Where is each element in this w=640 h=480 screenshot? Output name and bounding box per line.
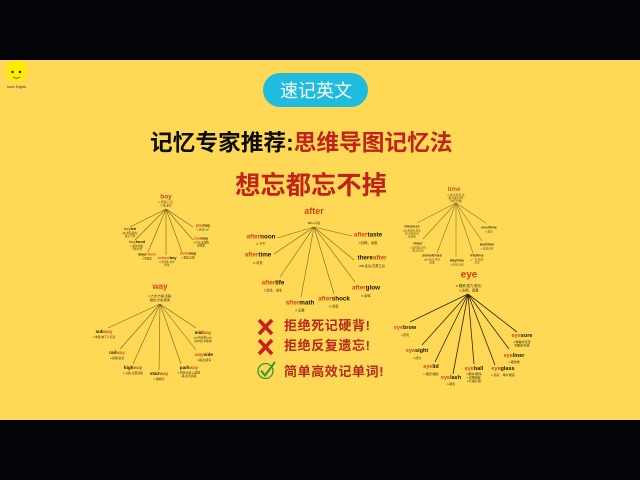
mind map: time: bedtime [480, 242, 494, 246]
mind map: way: way [151, 282, 168, 291]
mind map: boy: cowboy [194, 236, 209, 240]
mind map: eye: n.镜片、单片眼镜 [491, 372, 515, 377]
mind map: way: n.地铁;地下人行道 [93, 335, 116, 339]
mind map: boy: schoolboy [157, 256, 177, 260]
mind map: eye: eyebrow [394, 325, 417, 331]
mind map: time: n.时间;时刻;次 [447, 193, 465, 197]
mind map: way: n.路边;路旁 [197, 358, 211, 362]
mind map: after: thereafter [357, 254, 387, 261]
mind map: boy: boy [160, 194, 172, 200]
mind map: boy: boyfriend [138, 252, 156, 256]
item 3 text: 简单高效记单词! [284, 364, 384, 379]
mind map: time: adv.有时;不时 [424, 258, 440, 262]
mind map: eye: v.注视、观看 [459, 288, 479, 292]
mind map: eye: v.盯着打量 [467, 378, 481, 383]
mind map: after: n.余震 [329, 304, 339, 308]
mind map: way [93, 282, 213, 381]
mind map: eye: n.视力 [413, 355, 421, 360]
mind map: way: n.林荫大道;公园道 [178, 370, 201, 374]
mind map: way: parkway [180, 365, 199, 370]
mind map: time: adj.永恒的;永久 [403, 228, 421, 232]
mind map: eye [394, 270, 532, 386]
mind map: way: midway [195, 330, 212, 335]
mind map: after: afternoon [246, 233, 276, 240]
mind map: time: overtime [481, 226, 497, 230]
mind map: boy: 孩子气的 [125, 234, 136, 238]
mind map: way: 路,风景道路 [182, 374, 197, 378]
mind map: time: time [448, 186, 461, 193]
mind map: after: after [304, 206, 324, 216]
mind map: time: daytime [450, 258, 464, 262]
mind map: time: n.一生;终身; [470, 258, 484, 262]
item 2 text: 拒绝反复遗忘! [284, 338, 371, 353]
mind map: time: timeless [404, 224, 420, 228]
mind map: eye: n.眼线膏 [508, 359, 520, 364]
mind map: time: n.定时器;计时 [410, 246, 426, 250]
mind map: after: n.将来 [253, 260, 263, 265]
logo: smiley with caption: Learn English [7, 85, 26, 89]
mind map: after: aftershock [318, 295, 350, 302]
mind map: after [245, 206, 387, 312]
mind map: time: n.就寝时间 [481, 246, 494, 250]
mind map: way: n.方法;方面;道路; [148, 293, 172, 298]
mind map: time: timer [413, 242, 423, 246]
mind map: eye: n.眼球;眼珠; [466, 371, 482, 376]
title: 记忆专家推荐:思维导图记忆法 [150, 130, 452, 156]
mind map: eye: n.难看的东西; [513, 339, 531, 344]
icon: green check [258, 362, 275, 378]
mind map: time: 器;记时员 [412, 248, 424, 252]
mind map: after: n.余晖 [361, 293, 371, 298]
mind map: boy: n.花花公子 [197, 228, 210, 232]
mind map: boy: n.牛仔;美国西 [193, 240, 209, 244]
mind map: eye: v.仔细观察; [467, 374, 482, 380]
mind map: eye: eyeball [465, 366, 484, 372]
mind map: time: 数;时期;时代 [449, 196, 464, 200]
mind map: boy: playboy [196, 224, 211, 228]
mind map: boy: 男生 [164, 263, 170, 267]
mind map: time: 时机;倍数 [450, 199, 462, 203]
mind map: time: 影响的 [408, 234, 416, 238]
mind map: boy: newsboy [180, 252, 197, 256]
mind map: time: n.白天;日间 [450, 262, 464, 266]
mind map: way: railway [109, 350, 125, 355]
mind map: after: afterglow [352, 284, 380, 291]
mind map: time: lifetime [470, 254, 484, 258]
mind map: way: adj.中途的;adv. [194, 336, 213, 340]
mind map: way: highway [124, 365, 143, 370]
mind map: after: aftertaste [354, 231, 383, 238]
mind map: eye: eyesight [406, 348, 428, 354]
logo: smiley with caption [6, 60, 27, 89]
mind map: time: 的;不受时间 [405, 232, 419, 236]
mind map: after: n.下午 [256, 241, 266, 246]
mind map: boy: boyhood [129, 240, 146, 244]
mind map: way: n.铁路;轨道 [110, 356, 124, 360]
mind map: after: afterlife [262, 279, 285, 286]
badge: 速记英文 [263, 73, 368, 107]
mind map: boy: n.童年时期; [130, 244, 144, 248]
mind map: boy: 部牧童 [197, 244, 205, 248]
mind map: way: 在中途;半路地 [194, 339, 212, 343]
mind map: boy: n.男学生;中学 [159, 260, 175, 264]
mind map: eye: eye [461, 270, 478, 280]
mind map: after: aftertime [245, 251, 272, 258]
mind map: time: sometimes [422, 254, 442, 258]
mind map: eye: eyesore [512, 333, 532, 339]
mind map: eye: n.睫毛 [447, 381, 455, 386]
mind map: after: n.回味、余韵 [359, 240, 377, 245]
mind map: way: 路线;方向;距离 [150, 297, 170, 302]
mind map: eye: n.眉毛 [401, 332, 409, 337]
mind map: time: 间或 [429, 260, 435, 264]
checklist [258, 318, 384, 379]
mind map: eye: eyeliner [504, 353, 525, 359]
badge: 速记英文: 速记英文 [280, 81, 352, 101]
mind map: after: n.余生、来生 [264, 288, 283, 292]
item 1 text: 拒绝死记硬背! [284, 318, 371, 333]
mind map: time [403, 186, 497, 266]
mind map: eye: 刺眼的东西 [514, 342, 530, 348]
mind map: way: stairway [150, 371, 169, 376]
mind map: after: adv.以后 [308, 220, 321, 225]
mind map: time: n.加班 [485, 230, 493, 234]
mind map: boy [122, 194, 211, 267]
yellow background panel [0, 60, 640, 420]
mind map: after: n.后果 [295, 308, 305, 312]
mind map: eye: eyelid [423, 364, 439, 370]
mind map: way: n.楼梯间 [154, 377, 165, 381]
mind map: boy: n.报童,送报 [181, 256, 195, 260]
mind map: way: n.公路,主要道路 [123, 371, 143, 375]
mind map: boy: adj.男孩般的, [122, 231, 138, 235]
mind map: way: wayside [194, 352, 213, 357]
mind map: time: 寿命 [474, 260, 480, 264]
mind map: way: subway [96, 329, 113, 334]
mind map: after: adv.此后,在那之后 [359, 263, 386, 268]
icon: red cross 1 [259, 320, 272, 334]
mind map: boy: 少年;家伙 [160, 204, 172, 208]
subtitle: 想忘都忘不掉 [235, 172, 387, 200]
mind map: boy: n.男孩;儿子; [158, 200, 174, 204]
icon: red cross 2 [259, 340, 272, 354]
mind map: boy: n.男朋友 [142, 256, 152, 260]
mind map: boy: boyish [124, 227, 137, 231]
mind map: after: aftermath [286, 299, 315, 306]
mind map: eye: n.眼睛;视力;眼光; [456, 283, 482, 288]
mind map: eye: eyeglass [491, 366, 515, 372]
mind map: eye: eyelash [441, 375, 462, 381]
mind map: boy: 少年时代 [132, 247, 143, 251]
mind map: eye: n.眼皮,眼睑 [423, 371, 439, 376]
